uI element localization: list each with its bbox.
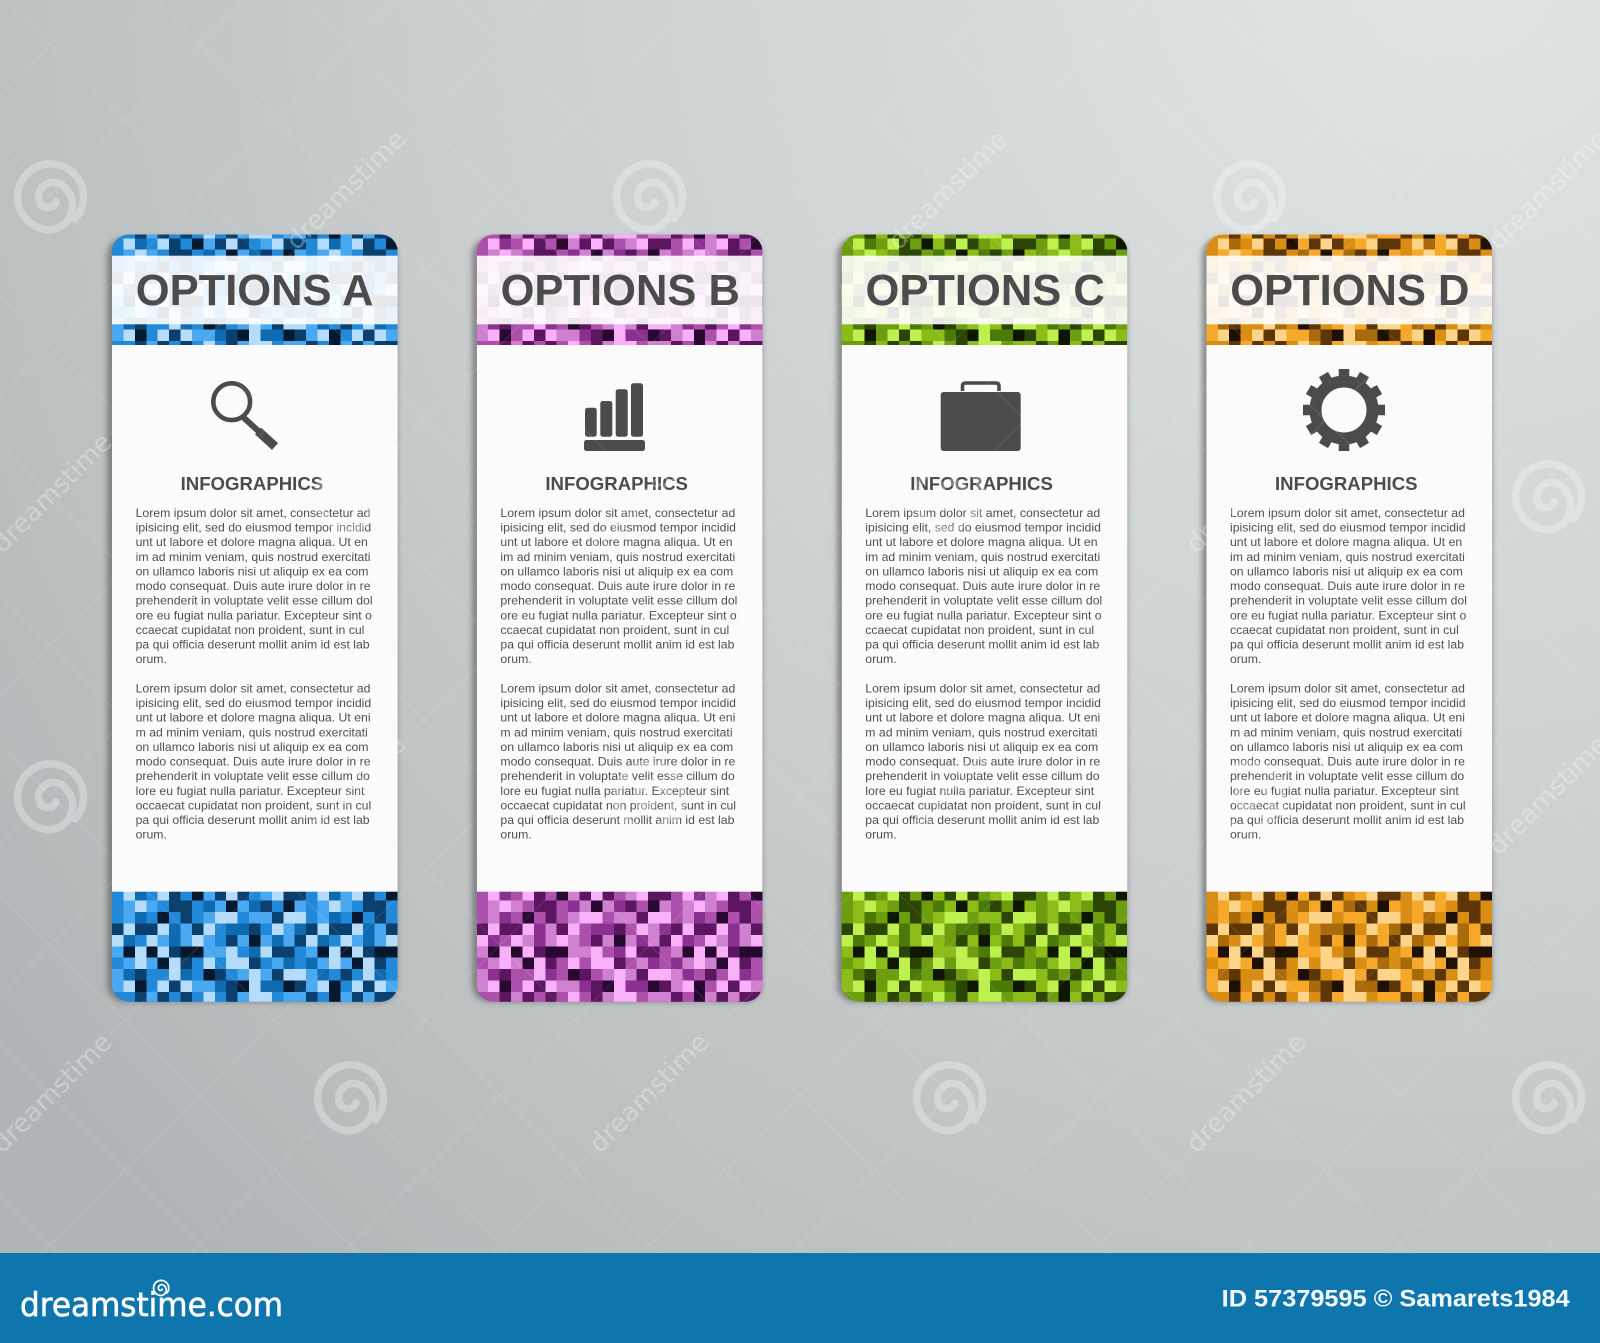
heading: options D: OPTIONS D	[1230, 267, 1469, 315]
watermark: diagonal dreamstime text: dreamstime	[281, 125, 412, 256]
footer image id and credit: ID 57379595 © Samarets1984	[1222, 1286, 1570, 1312]
text block B: m ad minim veniam, quis nostrud exercitati	[500, 725, 733, 739]
text block A: pa qui officia deserunt mollit anim id est lab	[136, 638, 370, 652]
text block B: unt ut labore et dolore magna aliqua. Ut en	[500, 535, 733, 549]
text block A: Lorem ipsum dolor sit amet, consectetur ad	[136, 506, 371, 520]
text block C: lore eu fugiat nulla pariatur. Excepteur sint	[865, 784, 1095, 798]
text block C: orum.	[865, 652, 897, 666]
text block A: ore eu fugiat nulla pariatur. Excepteur sint o	[136, 608, 372, 622]
text block A: lore eu fugiat nulla pariatur. Excepteur sint	[136, 784, 365, 798]
panel: options D	[1198, 234, 1496, 1005]
watermark: diagonal dreamstime text: dreamstime	[584, 1028, 715, 1159]
text block C: m ad minim veniam, quis nostrud exercitati	[865, 725, 1097, 739]
text block B: prehenderit in voluptate velit esse cillum dol	[500, 594, 737, 608]
text block C: Lorem ipsum dolor sit amet, consectetur ad	[865, 681, 1100, 695]
text block A: Lorem ipsum dolor sit amet, consectetur ad	[136, 681, 371, 695]
text block A: ccaecat cupidatat non proident, sunt in cul	[136, 623, 364, 637]
footer logo text: dreamstime.com	[20, 1285, 283, 1324]
text block B: orum.	[500, 828, 532, 842]
text block A: m ad minim veniam, quis nostrud exercitati	[136, 725, 368, 739]
text block B: prehenderit in voluptate velit esse cillum do	[500, 769, 735, 783]
text block D: lore eu fugiat nulla pariatur. Excepteur sint	[1230, 784, 1459, 798]
text block A: pa qui officia deserunt mollit anim id est lab	[136, 813, 370, 827]
watermark: diagonal dreamstime text: dreamstime	[281, 730, 412, 861]
text block A: on ullamco laboris nisi ut aliquip ex ea com	[136, 564, 368, 578]
subheading A: INFOGRAPHICS	[181, 473, 323, 494]
text block C: ccaecat cupidatat non proident, sunt in cul	[865, 623, 1094, 637]
text block A: prehenderit in voluptate velit esse cillum dol	[136, 594, 373, 608]
text block C: on ullamco laboris nisi ut aliquip ex ea com	[865, 740, 1098, 754]
text block D: orum.	[1230, 828, 1261, 842]
text block A: unt ut labore et dolore magna aliqua. Ut eni	[136, 711, 371, 725]
text block C: unt ut labore et dolore magna aliqua. Ut eni	[865, 711, 1100, 725]
text block C: unt ut labore et dolore magna aliqua. Ut en	[865, 535, 1098, 549]
text block C: pa qui officia deserunt mollit anim id est lab	[865, 638, 1099, 652]
text block D: ccaecat cupidatat non proident, sunt in cul	[1230, 623, 1459, 637]
text block D: on ullamco laboris nisi ut aliquip ex ea com	[1230, 564, 1463, 578]
text block B: pa qui officia deserunt mollit anim id est lab	[500, 813, 735, 827]
text block B: on ullamco laboris nisi ut aliquip ex ea com	[500, 740, 733, 754]
text block D: Lorem ipsum dolor sit amet, consectetur ad	[1230, 681, 1465, 695]
text block A: prehenderit in voluptate velit esse cillum do	[136, 769, 370, 783]
text block C: prehenderit in voluptate velit esse cillum dol	[865, 594, 1102, 608]
text block C: ipisicing elit, sed do eiusmod tempor incidid	[865, 521, 1101, 535]
text block C: Lorem ipsum dolor sit amet, consectetur ad	[865, 506, 1100, 520]
watermark: diagonal dreamstime text: dreamstime	[1181, 428, 1312, 559]
text block B: ccaecat cupidatat non proident, sunt in cul	[500, 623, 729, 637]
text block B: ipisicing elit, sed do eiusmod tempor incidid	[500, 696, 736, 710]
text block A: modo consequat. Duis aute irure dolor in re	[136, 579, 371, 593]
text block D: on ullamco laboris nisi ut aliquip ex ea com	[1230, 740, 1463, 754]
text block C: ore eu fugiat nulla pariatur. Excepteur sint o	[865, 608, 1102, 622]
text block D: prehenderit in voluptate velit esse cillum dol	[1230, 594, 1467, 608]
text block C: modo consequat. Duis aute irure dolor in re	[865, 579, 1100, 593]
text block B: pa qui officia deserunt mollit anim id est lab	[500, 638, 735, 652]
subheading D: INFOGRAPHICS	[1275, 473, 1418, 494]
text block D: occaecat cupidatat non proident, sunt in cul	[1230, 798, 1466, 812]
text block B: on ullamco laboris nisi ut aliquip ex ea com	[500, 564, 733, 578]
watermark: diagonal dreamstime text	[0, 125, 1600, 1159]
icon: gear	[1303, 369, 1385, 451]
icon: bar chart	[584, 383, 645, 451]
subheading B: INFOGRAPHICS	[545, 473, 688, 494]
text block B: im ad minim veniam, quis nostrud exercitati	[500, 550, 735, 564]
watermark: diagonal dreamstime text: dreamstime	[883, 125, 1014, 256]
text block C: occaecat cupidatat non proident, sunt in cul	[865, 798, 1101, 812]
text block D: ipisicing elit, sed do eiusmod tempor incidid	[1230, 521, 1466, 535]
text block A: modo consequat. Duis aute irure dolor in re	[136, 755, 371, 769]
text block C: prehenderit in voluptate velit esse cillum do	[865, 769, 1100, 783]
text block D: modo consequat. Duis aute irure dolor in re	[1230, 579, 1465, 593]
text block B: modo consequat. Duis aute irure dolor in re	[500, 579, 736, 593]
text block C: ipisicing elit, sed do eiusmod tempor incidid	[865, 696, 1101, 710]
watermark: diagonal dreamstime text: dreamstime	[1181, 1028, 1312, 1159]
text block C: on ullamco laboris nisi ut aliquip ex ea com	[865, 564, 1098, 578]
watermark: diagonal dreamstime text: dreamstime	[883, 730, 1014, 861]
text block C: modo consequat. Duis aute irure dolor in re	[865, 755, 1100, 769]
panel: options A	[104, 234, 400, 1005]
icon: magnifier	[213, 383, 275, 446]
text block C: pa qui officia deserunt mollit anim id est lab	[865, 813, 1099, 827]
text block D: ore eu fugiat nulla pariatur. Excepteur sint o	[1230, 608, 1466, 622]
heading: options B: OPTIONS B	[501, 267, 740, 315]
text block A: im ad minim veniam, quis nostrud exercitati	[136, 550, 370, 564]
text block B: ipisicing elit, sed do eiusmod tempor incidid	[500, 521, 736, 535]
text block D: pa qui officia deserunt mollit anim id est lab	[1230, 638, 1464, 652]
text block B: Lorem ipsum dolor sit amet, consectetur ad	[500, 681, 735, 695]
panel: options B	[468, 234, 766, 1005]
icon: briefcase	[941, 383, 1021, 451]
watermark: swirl logos	[18, 164, 1582, 1131]
text block D: prehenderit in voluptate velit esse cillum do	[1230, 769, 1464, 783]
text block B: occaecat cupidatat non proident, sunt in cul	[500, 798, 736, 812]
text block A: on ullamco laboris nisi ut aliquip ex ea com	[136, 740, 368, 754]
text block D: orum.	[1230, 652, 1261, 666]
panel: options C	[834, 234, 1130, 1005]
text block D: im ad minim veniam, quis nostrud exercitati	[1230, 550, 1465, 564]
heading: options C: OPTIONS C	[866, 267, 1105, 315]
text block C: im ad minim veniam, quis nostrud exercitati	[865, 550, 1100, 564]
text block B: unt ut labore et dolore magna aliqua. Ut eni	[500, 711, 735, 725]
text block B: lore eu fugiat nulla pariatur. Excepteur sint	[500, 784, 730, 798]
text block B: modo consequat. Duis aute irure dolor in re	[500, 755, 736, 769]
text block B: orum.	[500, 652, 532, 666]
text block D: Lorem ipsum dolor sit amet, consectetur ad	[1230, 506, 1465, 520]
text block C: orum.	[865, 828, 897, 842]
text block D: unt ut labore et dolore magna aliqua. Ut en	[1230, 535, 1462, 549]
text block B: ore eu fugiat nulla pariatur. Excepteur sint o	[500, 608, 737, 622]
text block D: unt ut labore et dolore magna aliqua. Ut eni	[1230, 711, 1465, 725]
text block A: orum.	[136, 828, 167, 842]
text block A: ipisicing elit, sed do eiusmod tempor incidid	[136, 696, 371, 710]
subheading C: INFOGRAPHICS	[910, 473, 1053, 494]
text block D: pa qui officia deserunt mollit anim id est lab	[1230, 813, 1464, 827]
text block A: occaecat cupidatat non proident, sunt in cul	[136, 798, 371, 812]
text block A: ipisicing elit, sed do eiusmod tempor incidid	[136, 521, 371, 535]
text block A: orum.	[136, 652, 167, 666]
text block B: Lorem ipsum dolor sit amet, consectetur ad	[500, 506, 735, 520]
watermark: diagonal dreamstime text: dreamstime	[584, 428, 715, 559]
text block D: modo consequat. Duis aute irure dolor in re	[1230, 755, 1465, 769]
footer bar	[0, 1253, 1600, 1343]
text block A: unt ut labore et dolore magna aliqua. Ut en	[136, 535, 368, 549]
heading: options A: OPTIONS A	[136, 267, 373, 315]
footer logo swirl	[154, 1280, 169, 1296]
text block D: m ad minim veniam, quis nostrud exercitati	[1230, 725, 1462, 739]
text block D: ipisicing elit, sed do eiusmod tempor incidid	[1230, 696, 1466, 710]
